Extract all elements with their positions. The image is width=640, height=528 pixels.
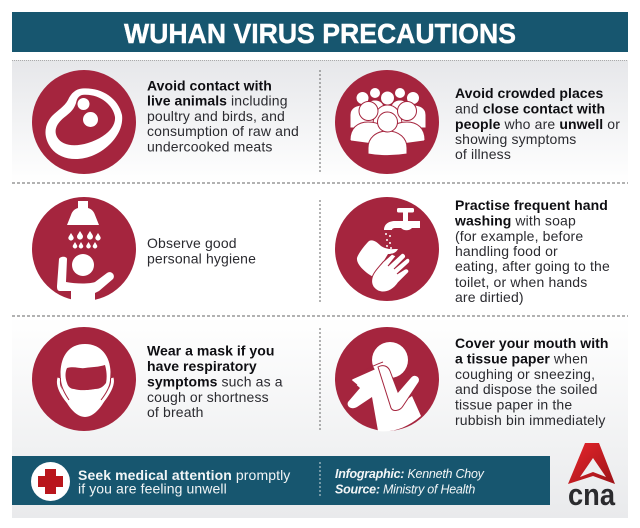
text: personal hygiene: Observe good [147,235,237,251]
text: cover your mouth: Cover your mouth with [455,335,608,351]
text: avoid crowded places: and close contact with [455,100,605,116]
logo: cna: cna [568,477,616,512]
panel: avoid live animals [32,70,303,174]
icon: face with mask [32,327,136,431]
text: cover your mouth: rubbish bin immediately [455,412,606,428]
icon: raw meat [32,70,136,174]
text: hand washing: eating, after going to the [455,258,610,274]
text: avoid live animals: undercooked meats [147,138,273,154]
text: avoid live animals: live animals including [147,92,288,108]
icon: shower [32,197,136,302]
text: avoid live animals: Avoid contact with [147,78,272,94]
footer bar [12,456,550,505]
panel: cover your mouth [335,327,613,431]
icon: person coughing into tissue [335,327,439,431]
text: seek medical attention: if you are feeling unwell [78,480,227,496]
text: personal hygiene: personal hygiene [147,250,256,266]
panel: wear a mask [32,327,287,431]
text: avoid live animals: consumption of raw and [147,123,299,139]
text: hand washing: washing with soap [455,212,576,228]
text: wear a mask: symptoms such as a [147,374,283,390]
text: seek medical attention: promptly [232,467,290,483]
text: credits: Kenneth Choy [404,467,485,481]
panel: avoid crowded places [335,70,624,174]
text: credits: Infographic: [335,467,404,481]
text: hand washing: handling food or [455,243,558,259]
text: hand washing: (for example, before [455,228,583,244]
logo: cna [568,443,616,512]
panel: personal hygiene [32,197,256,302]
text: hand washing: are dirtied) [455,289,524,305]
text: cover your mouth: and dispose the soiled [455,381,598,397]
text: avoid crowded places: showing symptoms [455,131,576,147]
text: cover your mouth: tissue paper in the [455,396,572,412]
text: wear a mask: Wear a mask if you [147,342,274,358]
title banner: WUHAN VIRUS PRECAUTIONS [124,18,516,49]
text: avoid live animals: poultry and birds, and [147,108,285,124]
text: hand washing: toilet, or when hands [455,274,587,290]
panel: hand washing [335,197,614,305]
icon: tap and hands [335,197,439,301]
text: wear a mask: of breath [147,404,204,420]
text: avoid crowded places: of illness [455,146,511,162]
text: credits: Ministry of Health [380,482,475,496]
text: credits: Source: [335,482,380,496]
text: cover your mouth: coughing or sneezing, [455,366,595,382]
title banner [12,12,628,52]
icon: crowd [335,70,439,174]
text: cover your mouth: a tissue paper when [455,350,588,366]
text: hand washing: Practise frequent hand [455,197,608,213]
text: seek medical attention: Seek medical attention [78,467,232,483]
text: avoid crowded places: people who are unwell or [455,116,620,132]
icon: medical cross [31,462,70,501]
text: wear a mask: have respiratory [147,358,257,374]
text: avoid crowded places: Avoid crowded places [455,85,603,101]
text: wear a mask: cough or shortness [147,389,269,405]
